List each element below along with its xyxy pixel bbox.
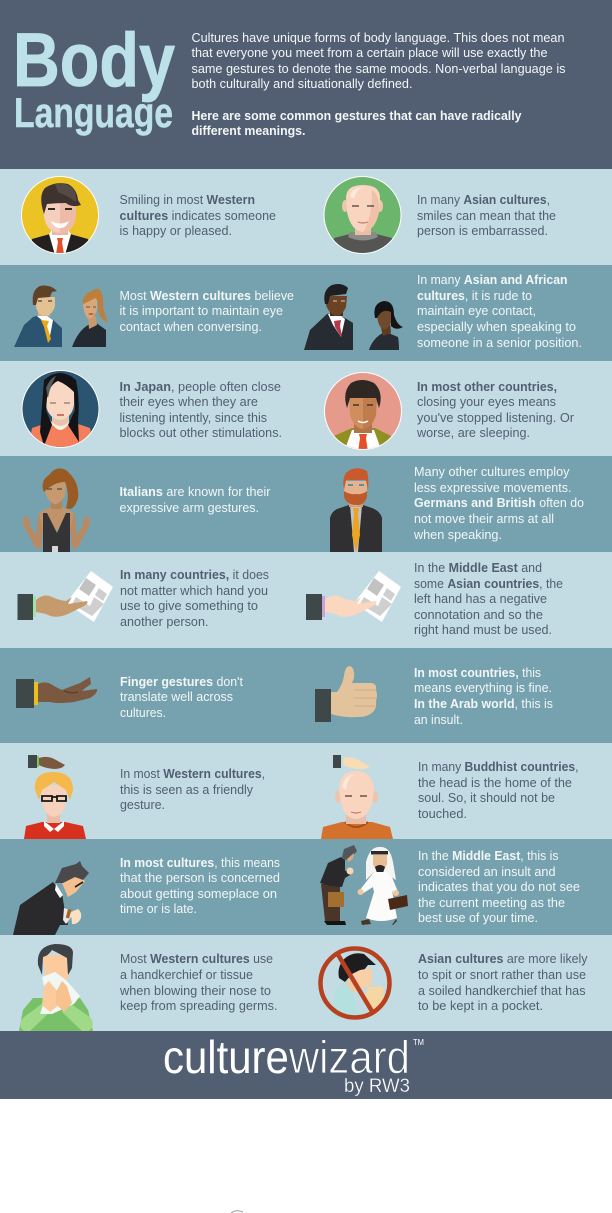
icon: dark hand with finger gesture — [16, 677, 97, 708]
title — [13, 18, 175, 136]
text: less expressive cultures — [413, 464, 584, 542]
text: head touch western: gesture. — [120, 797, 165, 812]
intro text: different meanings. — [192, 123, 306, 138]
text: either hand: In many countries, it does — [120, 567, 269, 582]
icon: japanese woman avatar — [22, 370, 100, 450]
text: eye contact asian and african: maintain eye contact, — [417, 303, 536, 318]
icon: man checking watch — [13, 861, 89, 935]
icon: hand on bald head — [321, 755, 393, 839]
text: eye contact asian and african: especially when speaking to — [417, 319, 576, 334]
icon: thumbs up — [315, 666, 377, 722]
text: right hand: left hand has a negative — [414, 591, 547, 606]
icon: red-haired man in suit — [330, 468, 382, 552]
text: eye contact western: Most Western cultures believe — [120, 288, 294, 303]
text: head touch buddhist: In many Buddhist countries, — [418, 759, 578, 774]
text: middle east watch: the current meeting as the — [418, 895, 565, 910]
text: less expressive cultures: not move their arms at all — [414, 511, 554, 526]
icon: hand giving paper, tan — [18, 571, 113, 622]
text: middle east watch — [418, 848, 580, 925]
text: head touch buddhist — [418, 759, 578, 821]
text: checking watch: that the person is concerned — [120, 870, 280, 885]
text: smiling asian — [417, 192, 556, 238]
text: handkerchief asian: Asian cultures are more likely — [418, 951, 588, 966]
text: checking watch: time or is late. — [120, 901, 197, 916]
text: middle east watch: indicates that you do not see — [418, 879, 580, 894]
text: smiling western: cultures indicates someone — [120, 208, 276, 223]
text: right hand: right hand must be used. — [414, 622, 552, 637]
text: head touch western — [120, 766, 265, 812]
text: eye contact western: contact when conversing. — [120, 319, 262, 334]
text: right hand: In the Middle East and — [414, 560, 542, 575]
logo: culturewizard by RW3: TM — [413, 1038, 424, 1047]
icon: person blowing nose — [19, 944, 93, 1031]
text: head touch buddhist: touched. — [418, 806, 467, 821]
intro text: same gestures to denote the same moods. Non-verbal language is — [192, 61, 566, 76]
text: smiling western: is happy or pleased. — [120, 223, 232, 238]
text: eye contact asian and african: cultures, it is rude to — [417, 288, 532, 303]
text: middle east watch: In the Middle East, this is — [418, 848, 559, 863]
text: finger gestures: Finger gestures don't — [120, 674, 243, 689]
text: smiling western: Smiling in most Western — [120, 192, 255, 207]
text: closed eyes japan — [120, 379, 282, 440]
text: thumbs up meaning — [414, 665, 553, 727]
text: thumbs up meaning: In the Arab world, this is — [414, 696, 553, 711]
text: thumbs up meaning: means everything is fine. — [414, 680, 552, 695]
text: either hand: another person. — [120, 614, 208, 629]
text: eye contact asian and african: In many Asian and African — [417, 272, 568, 287]
text: finger gestures: translate well across — [120, 689, 233, 704]
text: italians: Italians are known for their — [120, 484, 271, 499]
logo: culturewizard by RW3: culturewizard — [163, 1031, 410, 1083]
text: handkerchief western: when blowing their nose to — [119, 983, 271, 998]
intro text: both culturally and situationally defined. — [192, 76, 412, 91]
text: handkerchief asian: to be kept in a pocket. — [418, 998, 543, 1013]
text: finger gestures — [120, 674, 243, 720]
row bands — [0, 169, 612, 1031]
small mark at page bottom — [231, 1211, 243, 1213]
icon: asian and african man and woman — [304, 284, 403, 350]
logo: culturewizard by RW3: by RW3 — [344, 1076, 410, 1097]
text: handkerchief western: a handkerchief or tissue — [120, 967, 253, 982]
icon: western man and woman — [14, 286, 108, 347]
text: closed eyes other countries: In most other countries, — [417, 379, 557, 394]
text: head touch buddhist: the head is the home of the — [418, 775, 572, 790]
text: handkerchief asian: a soiled handkerchief that has — [418, 983, 586, 998]
text: smiling asian: person is embarrassed. — [417, 223, 548, 238]
intro text — [192, 30, 566, 138]
text: thumbs up meaning: In most countries, this — [414, 665, 541, 680]
text: eye contact asian and african: someone in a senior position. — [417, 335, 582, 350]
icon: man with watch and arab man — [320, 845, 408, 925]
text: checking watch: about getting someplace on — [120, 886, 277, 901]
text: closed eyes other countries: you've stopped listening. Or — [417, 410, 575, 425]
text: handkerchief western — [119, 951, 278, 1013]
text: smiling western — [120, 192, 276, 238]
text: head touch western: this is seen as a friendly — [120, 782, 253, 797]
text: right hand — [414, 560, 563, 637]
intro text: Cultures have unique forms of body language. This does not mean — [192, 30, 564, 45]
text: thumbs up meaning: an insult. — [414, 712, 463, 727]
intro text: Here are some common gestures that can have radically — [192, 108, 522, 123]
text: handkerchief western: keep from spreading germs. — [120, 998, 278, 1013]
text: handkerchief asian — [418, 951, 588, 1013]
icon: hand on blond head — [24, 755, 86, 839]
text: head touch western: In most Western cultures, — [120, 766, 265, 781]
text: closed eyes japan: their eyes when they are — [120, 394, 258, 409]
text: right hand: some Asian countries, the — [414, 576, 563, 591]
icon: no handkerchief sign — [320, 948, 390, 1018]
text: less expressive cultures: less expressive movements. — [414, 480, 572, 495]
text: closed eyes other countries: worse, are sleeping. — [416, 425, 530, 440]
text: closed eyes japan: listening intently, since this — [120, 410, 267, 425]
intro text: that everyone you meet from a certain place will use exactly the — [192, 45, 548, 60]
title: Language — [14, 89, 173, 136]
text: right hand: connotation and so the — [414, 607, 543, 622]
text: eye contact asian and african — [417, 272, 582, 350]
text: less expressive cultures: when speaking. — [413, 527, 502, 542]
text: either hand — [120, 567, 269, 629]
icon: bald man avatar — [324, 176, 402, 255]
text: closed eyes japan: In Japan, people often close — [120, 379, 281, 394]
icon: man with closed eyes avatar — [324, 372, 402, 452]
text: either hand: use to give something to — [120, 598, 258, 613]
text: smiling asian: smiles can mean that the — [417, 208, 556, 223]
text: eye contact western — [120, 288, 294, 334]
header band — [0, 0, 612, 169]
text: smiling asian: In many Asian cultures, — [417, 192, 550, 207]
text: handkerchief western: Most Western cultures use — [120, 951, 273, 966]
text: handkerchief asian: to spit or snort rather than use — [418, 967, 586, 982]
text: middle east watch: considered an insult and — [418, 864, 556, 879]
text: middle east watch: best use of your time. — [418, 910, 538, 925]
icon: italian woman gesturing — [22, 468, 91, 552]
icon: hand giving paper, light — [306, 571, 401, 622]
text: italians: expressive arm gestures. — [120, 500, 259, 515]
text: closed eyes other countries: closing your eyes means — [417, 394, 556, 409]
text: closed eyes other countries — [416, 379, 575, 440]
text: checking watch: In most cultures, this means — [120, 855, 280, 870]
footer band — [0, 1031, 612, 1099]
text: less expressive cultures: Germans and British often do — [414, 495, 584, 510]
text: checking watch — [120, 855, 280, 916]
text: finger gestures: cultures. — [120, 705, 166, 720]
text: eye contact western: it is important to maintain eye — [120, 303, 283, 318]
title: Body — [13, 18, 175, 103]
text: less expressive cultures: Many other cultures employ — [414, 464, 570, 479]
text: either hand: not matter which hand you — [120, 583, 268, 598]
text: head touch buddhist: soul. So, it should not be — [418, 790, 555, 805]
text: italians — [120, 484, 271, 515]
icon: smiling man avatar — [21, 176, 99, 255]
text: closed eyes japan: blocks out other stimulations. — [120, 425, 282, 440]
